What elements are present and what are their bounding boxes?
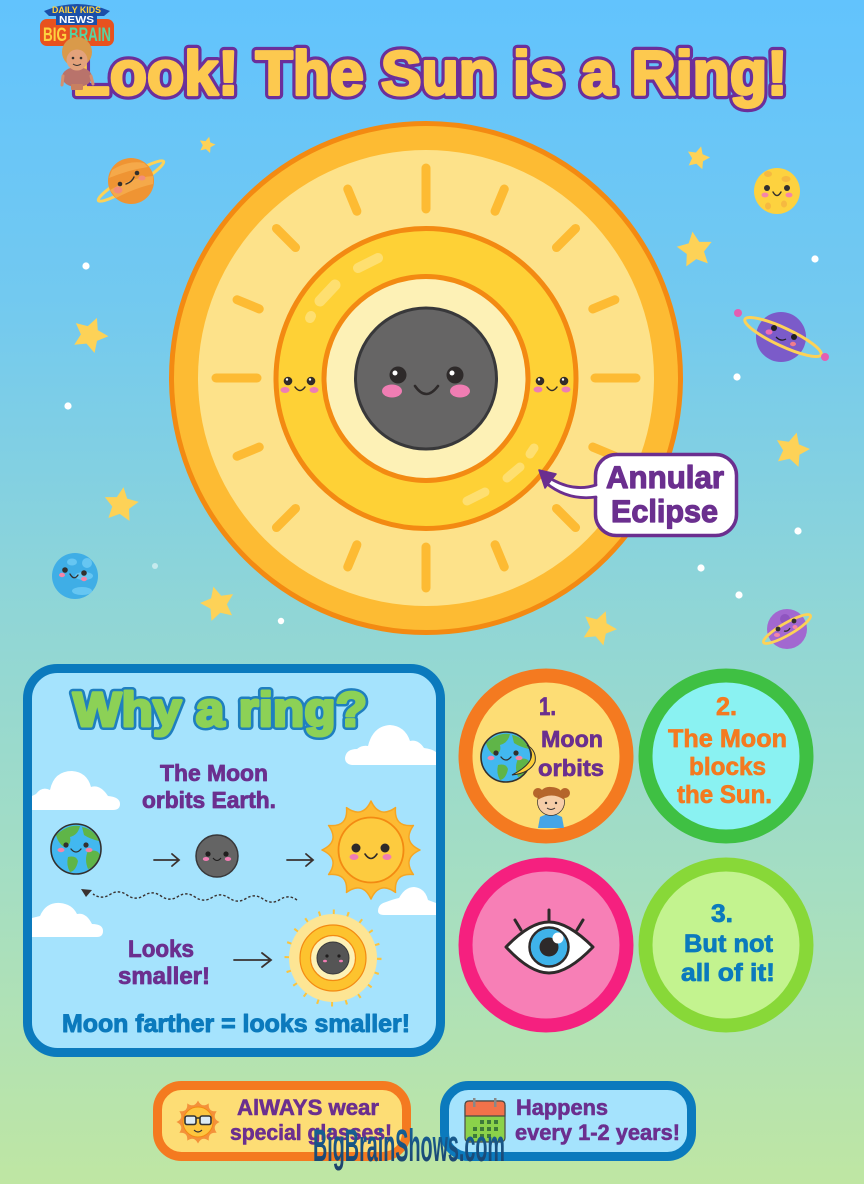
cloud: top right xyxy=(345,725,436,765)
step: eye xyxy=(466,864,626,1026)
step 1: moon orbits xyxy=(466,676,626,836)
logo: Daily Kids News with Big Brain xyxy=(40,4,114,46)
logo: Daily Kids News with Big Brain: BIG xyxy=(43,25,67,46)
text: the moon orbits earth: The Moon xyxy=(160,760,268,786)
step 2: moon blocks sun xyxy=(646,676,806,836)
icon: mini annular eclipse xyxy=(288,913,378,1003)
step 3: but not all of it xyxy=(646,864,806,1026)
icon: girl xyxy=(533,787,570,828)
text: looks smaller xyxy=(118,936,210,990)
icon: calendar xyxy=(465,1098,505,1142)
mascot boy xyxy=(62,37,93,90)
cloud: lower left xyxy=(32,903,103,937)
step 2: moon blocks sun: blocks xyxy=(689,753,766,781)
planet: yellow moon xyxy=(754,168,800,214)
title: Look! The Sun is a Ring! xyxy=(72,40,788,108)
text: moon farther looks smaller: Moon farther = looks smaller! xyxy=(62,1010,410,1038)
text: BigBrainShows.com xyxy=(313,1120,505,1171)
icon: sun with glasses xyxy=(176,1100,220,1144)
planet: small violet ringed xyxy=(761,609,813,649)
planet: purple ringed xyxy=(734,309,829,363)
step 2: moon blocks sun: the Sun. xyxy=(677,781,772,809)
ring face: right xyxy=(534,377,570,392)
planet: blue xyxy=(52,553,98,599)
cloud: middle right xyxy=(378,887,436,915)
tip: happens every 1-2 years: every 1-2 years! xyxy=(515,1120,680,1145)
icon: earth with crescent moon xyxy=(481,732,535,782)
cloud: upper left xyxy=(32,771,120,810)
heading: why a ring: Why a ring? xyxy=(73,684,367,737)
text: the moon orbits earth: orbits Earth. xyxy=(142,787,276,813)
step 3: but not all of it: all of it! xyxy=(681,959,775,987)
logo: Daily Kids News with Big Brain: BRAIN xyxy=(69,25,111,46)
tip: wear special glasses xyxy=(158,1086,406,1156)
ring face: left xyxy=(280,377,318,393)
step 1: moon orbits: orbits xyxy=(538,755,604,781)
step 2: moon blocks sun: The Moon xyxy=(668,725,787,753)
icon: earth xyxy=(51,824,101,874)
decorative stars and dots xyxy=(64,135,819,648)
step 1: moon orbits: Moon xyxy=(541,726,603,752)
tip: happens every 1-2 years xyxy=(444,1086,692,1156)
callout: annular eclipse: Eclipse xyxy=(611,493,718,529)
planet: orange ringed xyxy=(95,156,167,206)
callout: annular eclipse xyxy=(539,454,736,536)
tip: wear special glasses: special glasses! xyxy=(230,1120,392,1145)
arrow: earth to moon xyxy=(154,854,179,866)
step 2: moon blocks sun: 2. xyxy=(716,693,737,721)
panel: why a ring xyxy=(28,668,440,1052)
step 3: but not all of it: 3. xyxy=(711,900,733,928)
icon: smiling sun xyxy=(322,801,420,899)
text: looks smaller: smaller! xyxy=(118,963,210,990)
arrow: moon to sun xyxy=(287,854,313,866)
sun xyxy=(172,124,680,632)
logo: Daily Kids News with Big Brain: NEWS xyxy=(59,15,94,26)
text: looks smaller: Looks xyxy=(128,936,194,963)
moon in front of sun xyxy=(356,308,496,449)
title: Look! The Sun is a Ring! xyxy=(72,40,788,108)
tip: wear special glasses: AlWAYS wear xyxy=(237,1095,379,1120)
arrow: wavy dotted orbit path xyxy=(81,889,297,902)
icon: moon xyxy=(196,835,238,877)
heading: why a ring: Why a ring? xyxy=(73,684,367,737)
callout: annular eclipse: Annular xyxy=(606,459,724,495)
step 1: moon orbits: 1. xyxy=(539,693,556,721)
text: the moon orbits earth xyxy=(142,760,276,813)
arrow: looks smaller xyxy=(234,953,271,967)
logo: Daily Kids News with Big Brain: DAILY KIDS xyxy=(52,5,101,15)
tip: happens every 1-2 years: Happens xyxy=(516,1095,608,1120)
step 3: but not all of it: But not xyxy=(684,930,774,958)
icon: eye xyxy=(506,910,593,973)
